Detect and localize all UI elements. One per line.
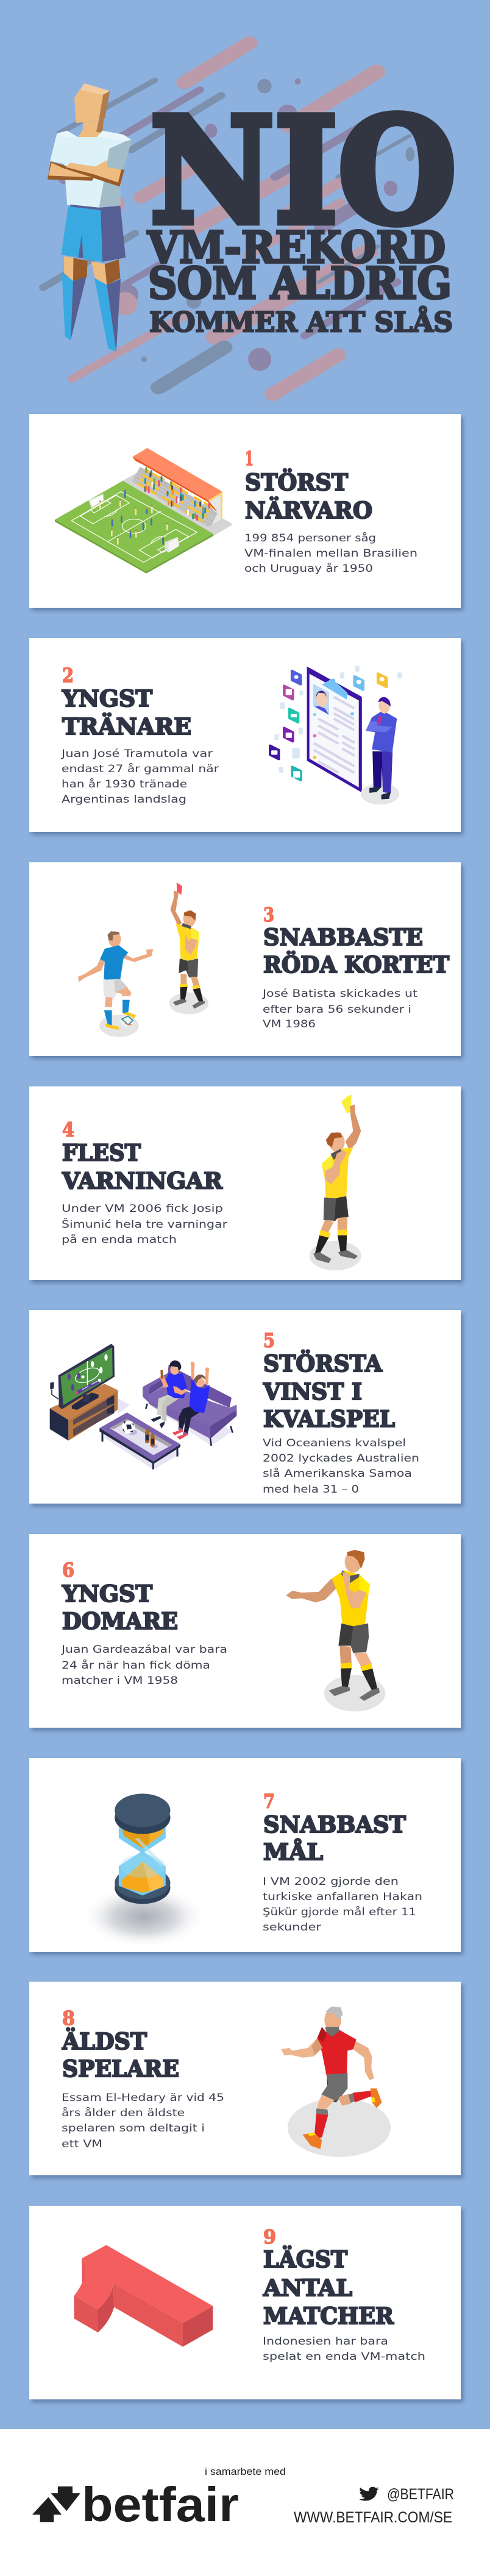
title: NIO: NIO [150,86,456,257]
credit line: i samarbete med [205,2466,286,2477]
player figure [48,83,132,351]
body text [244,532,417,575]
icon: hourglass [81,1793,206,1949]
body text: Juan José Tramutola var [61,748,213,760]
panel: 5 största vinst i kvalspel [29,1310,461,1504]
heading: KVALSPEL [263,1406,395,1432]
panel: 3 snabbaste röda kortet [29,862,461,1056]
body text: Šimunić hela tre varningar [62,1217,228,1231]
body text [262,988,417,1030]
body text: Under VM 2006 fick Josip [62,1203,223,1215]
body text [62,2092,224,2150]
body text: spelaren som deltagit i [62,2122,205,2134]
heading: DOMARE [62,1608,178,1635]
icon: fans on sofa watching TV [50,1344,236,1469]
heading: ÄLDST [62,2027,147,2055]
body text: Juan Gardeazábal var bara [61,1644,227,1656]
heading: VARNINGAR [62,1167,223,1194]
number 6: 6 [62,1558,74,1582]
body text: endast 27 år gammal när [62,762,219,775]
number 9: 9 [263,2225,276,2248]
number 5: 5 [263,1329,275,1352]
icon: big number one [74,2245,213,2347]
body text: VM-finalen mellan Brasilien [244,547,417,560]
heading [263,924,449,978]
number 8: 8 [62,2007,75,2030]
header [43,43,456,394]
heading [62,1580,178,1635]
twitter handle: @BETFAIR [387,2486,454,2503]
heading [263,2245,394,2329]
number 2: 2 [62,664,74,687]
body text: års ålder den äldste [62,2106,185,2119]
heading: MATCHER [263,2303,394,2329]
heading: RÖDA KORTET [263,951,449,978]
body text: Şükür gjorde mål efter 11 [263,1906,416,1918]
body text: på en enda match [62,1233,177,1246]
heading: NÄRVARO [245,496,372,524]
heading [263,1350,395,1432]
body text [263,1437,419,1496]
heading: STÖRSTA [263,1350,383,1377]
panel: 4 flest varningar [29,1086,461,1280]
icon: stadium [55,448,232,574]
background stripes [43,43,414,394]
body text: Argentinas landslag [62,794,186,806]
panel: 8 äldst spelare [29,1982,461,2175]
body text: med hela 31 – 0 [263,1483,359,1496]
body text: VM 1986 [263,1018,316,1030]
title: KOMMER ATT SLÅS: KOMMER ATT SLÅS [149,306,453,339]
heading [263,1811,406,1865]
body text: sekunder [263,1921,322,1934]
heading: YNGST [62,685,152,712]
icon: old runner [282,2007,391,2157]
body text: 2002 lyckades Australien [263,1452,419,1465]
panel: 9 lägst antal matcher [29,2206,461,2399]
body text [62,1203,228,1246]
body text: och Uruguay år 1950 [244,562,373,575]
body text: 199 854 personer såg [244,532,376,544]
footer [0,2429,490,2576]
body text: José Batista skickades ut [262,988,417,1000]
body text: 24 år när han fick döma [62,1659,210,1672]
body text [263,1876,422,1934]
heading: LÄGST [263,2245,347,2273]
panel: 1 störst närvaro [29,414,461,608]
heading: TRÄNARE [62,713,191,740]
icon: twitter bird [359,2487,379,2500]
body text: matcher i VM 1958 [62,1675,178,1687]
panel: 6 yngst domare [29,1534,461,1728]
body text: spelat en enda VM-match [263,2351,425,2363]
heading [245,468,372,524]
title: VM-REKORD: VM-REKORD [147,222,446,273]
betfair logo: betfair [82,2477,239,2532]
number 7: 7 [263,1790,275,1813]
body text: I VM 2002 gjorde den [263,1876,399,1888]
heading [62,1139,223,1194]
heading: YNGST [62,1580,152,1607]
body text: Vid Oceaniens kvalspel [263,1437,406,1449]
heading: SPELARE [62,2055,179,2082]
body text [61,748,219,806]
panel: 2 yngst tränare [29,638,461,832]
number 3: 3 [263,903,274,926]
heading: SNABBASTE [263,924,423,951]
heading: STÖRST [245,468,348,496]
heading [62,2027,179,2082]
body text: han år 1930 tränade [62,778,187,790]
heading: ANTAL [263,2275,352,2301]
heading: FLEST [62,1139,141,1166]
body text: Indonesien har bara [263,2335,388,2348]
heading [62,685,191,740]
title: SOM ALDRIG: SOM ALDRIG [148,258,452,309]
panel: 7 snabbast mål [29,1758,461,1952]
body text: Essam El-Hedary är vid 45 [62,2092,224,2104]
website: WWW.BETFAIR.COM/SE [294,2509,452,2526]
heading: SNABBAST [263,1811,406,1838]
icon: referee with yellow cards [310,1095,361,1270]
heading: VINST I [263,1378,362,1405]
icon: young referee [286,1550,385,1711]
body text: efter bara 56 sekunder i [263,1004,411,1016]
heading: MÅL [263,1839,323,1865]
number 4: 4 [62,1118,74,1141]
body text [61,1644,227,1687]
body text: ett VM [62,2138,102,2150]
icon: CV and coach [270,666,402,804]
icon: referee showing red card to player [78,882,208,1037]
number 1: 1 [245,447,254,470]
body text: slå Amerikanska Samoa [263,1467,412,1480]
body text: turkiske anfallaren Hakan [263,1891,422,1903]
body text [263,2335,425,2363]
